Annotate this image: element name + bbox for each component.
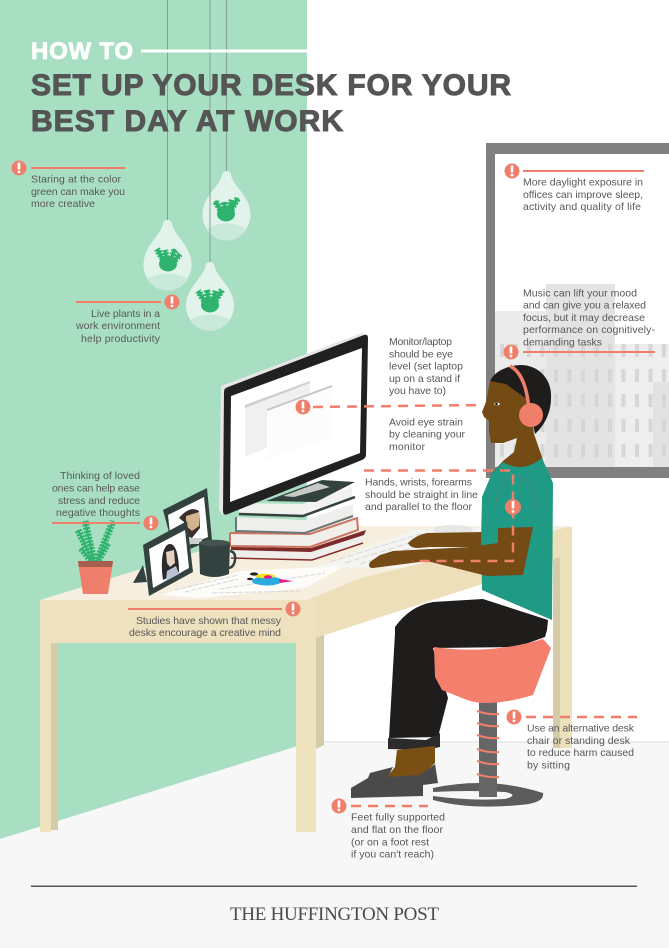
keyboard [315, 526, 520, 568]
callout: loved ones: stress and reduce [58, 495, 140, 507]
book stack [230, 480, 366, 560]
callout: daylight: activity and quality of life [523, 201, 641, 213]
neck and face [482, 381, 545, 475]
eye [494, 403, 500, 405]
callout: eye strain: monitor [389, 441, 426, 453]
window [486, 143, 669, 478]
headphone cup [519, 403, 543, 427]
title: line two: BEST DAY AT WORK [31, 105, 343, 138]
alert icon [286, 602, 300, 616]
plant bulb one [202, 0, 250, 241]
callout: arms straight: should be straight in line [365, 489, 478, 501]
callout: eye level: up on a stand if [389, 373, 460, 385]
front right leg [296, 635, 324, 832]
alert icon [164, 294, 180, 310]
callout: alternative chair: to reduce harm caused [527, 747, 634, 759]
callout: feet [332, 798, 445, 860]
shoulder seam [495, 475, 537, 510]
monitor [219, 333, 368, 515]
portrait [179, 509, 202, 544]
background: floor [0, 742, 669, 948]
mouse [433, 525, 473, 535]
title [31, 38, 511, 138]
desk side face [307, 527, 572, 645]
plant bulb three [186, 0, 234, 331]
callout: feet: Feet fully supported [351, 812, 445, 824]
front arm [369, 527, 533, 576]
book one [239, 480, 355, 516]
publisher name: THE HUFFINGTON POST [230, 904, 439, 925]
front left leg [40, 643, 58, 832]
desk front face [40, 600, 316, 643]
screen [230, 348, 362, 502]
leaves [157, 249, 180, 272]
callout: live plants: help productivity [81, 333, 161, 345]
callout: alternative chair: by sitting [527, 760, 570, 772]
callout: music: demanding tasks [523, 336, 602, 348]
shoe [351, 764, 438, 798]
pole [479, 700, 497, 797]
potted plant [78, 521, 113, 594]
callout: music [504, 288, 656, 360]
ink blot [247, 572, 293, 586]
callout: eye level: level (set laptop [389, 360, 463, 372]
floor line [320, 742, 669, 743]
portrait [162, 544, 179, 581]
callout: eye level: you have to) [389, 385, 446, 397]
callout: feet: and flat on the floor [351, 824, 444, 836]
book three [230, 518, 358, 547]
callout: colour green [12, 160, 125, 210]
leaves [198, 290, 222, 312]
desk [40, 526, 572, 832]
callout: arms straight [364, 470, 521, 561]
alert icon [12, 160, 26, 176]
photo frame: man [163, 488, 212, 555]
callout: daylight: More daylight exposure in [523, 176, 643, 188]
callout: eye level: should be eye [389, 348, 453, 360]
title: line one: SET UP YOUR DESK FOR YOUR [31, 69, 511, 102]
callout: live plants [75, 294, 180, 345]
leaves [215, 198, 238, 222]
title rule [141, 50, 307, 52]
alert icon [504, 344, 518, 360]
seat [434, 639, 551, 703]
callout: eye strain [389, 416, 466, 453]
hair [490, 365, 551, 434]
alert icon [506, 710, 522, 724]
callout: messy desks: desks encourage a creative mind [129, 627, 281, 639]
callout: eye strain: Avoid eye strain [389, 416, 463, 428]
papers on desk [160, 566, 345, 598]
callout: arms straight: and parallel to the floor [365, 501, 472, 513]
book two [236, 504, 353, 533]
background: mint wall [0, 0, 307, 839]
callout: music: performance on cognitively- [523, 324, 656, 336]
plant bulb two [144, 0, 192, 291]
mug [199, 540, 235, 577]
callout: live plants: work environment [75, 320, 160, 332]
city skyline [495, 284, 669, 467]
window panel front [267, 385, 332, 460]
callout: daylight [504, 164, 644, 213]
callout: loved ones: negative thoughts [56, 507, 140, 519]
spring [477, 711, 499, 777]
hanging plants [144, 0, 250, 331]
trousers [389, 599, 548, 738]
alert icon [332, 798, 346, 814]
person [351, 365, 553, 798]
alert icon [504, 164, 520, 178]
callout: loved ones: Thinking of loved [60, 470, 140, 482]
callout: music: and can give you a relaxed [523, 300, 646, 312]
callout: alternative chair [506, 710, 637, 772]
callout: messy desks [128, 602, 300, 639]
callout: messy desks: Studies have shown that messy [136, 615, 282, 627]
callout: alternative chair: Use an alternative desk [527, 722, 635, 734]
stool [433, 639, 551, 807]
desk surface [40, 526, 572, 600]
pot [78, 562, 113, 594]
back arm [408, 532, 484, 548]
callout: feet: (or on a foot rest [351, 836, 429, 848]
base [433, 783, 543, 807]
callout: daylight: offices can improve sleep, [523, 189, 643, 201]
alert icon [505, 499, 521, 515]
callout: music: Music can lift your mood [523, 288, 637, 300]
ankle [387, 746, 435, 777]
callout: arms straight: Hands, wrists, forearms [365, 476, 472, 488]
title: how to: HOW TO [31, 38, 133, 65]
shirt [481, 458, 553, 620]
callout: eye level: Monitor/laptop [389, 336, 452, 348]
trouser cuff [388, 733, 440, 750]
leaves [78, 521, 113, 566]
alert icon [144, 516, 158, 530]
callout: live plants: Live plants in a [91, 308, 160, 320]
callout: colour green: Staring at the color [31, 174, 122, 186]
callout: music: focus, but it may decrease [523, 312, 645, 324]
callout: colour green: more creative [31, 198, 95, 210]
callout: feet: if you can't reach) [351, 848, 434, 860]
callout: eye level [296, 336, 482, 414]
callout: alternative chair: chair or standing desk [527, 735, 631, 747]
callout: loved ones: ones can help ease [52, 482, 140, 494]
callout: eye strain: by cleaning your [389, 428, 466, 440]
window panel back [245, 381, 310, 457]
book four [231, 530, 366, 560]
headphone band [510, 366, 529, 410]
callout: loved ones [52, 470, 158, 530]
back right leg [553, 527, 572, 748]
alert icon [296, 400, 310, 414]
callout: colour green: green can make you [31, 186, 125, 198]
photo frame: woman [133, 521, 193, 596]
